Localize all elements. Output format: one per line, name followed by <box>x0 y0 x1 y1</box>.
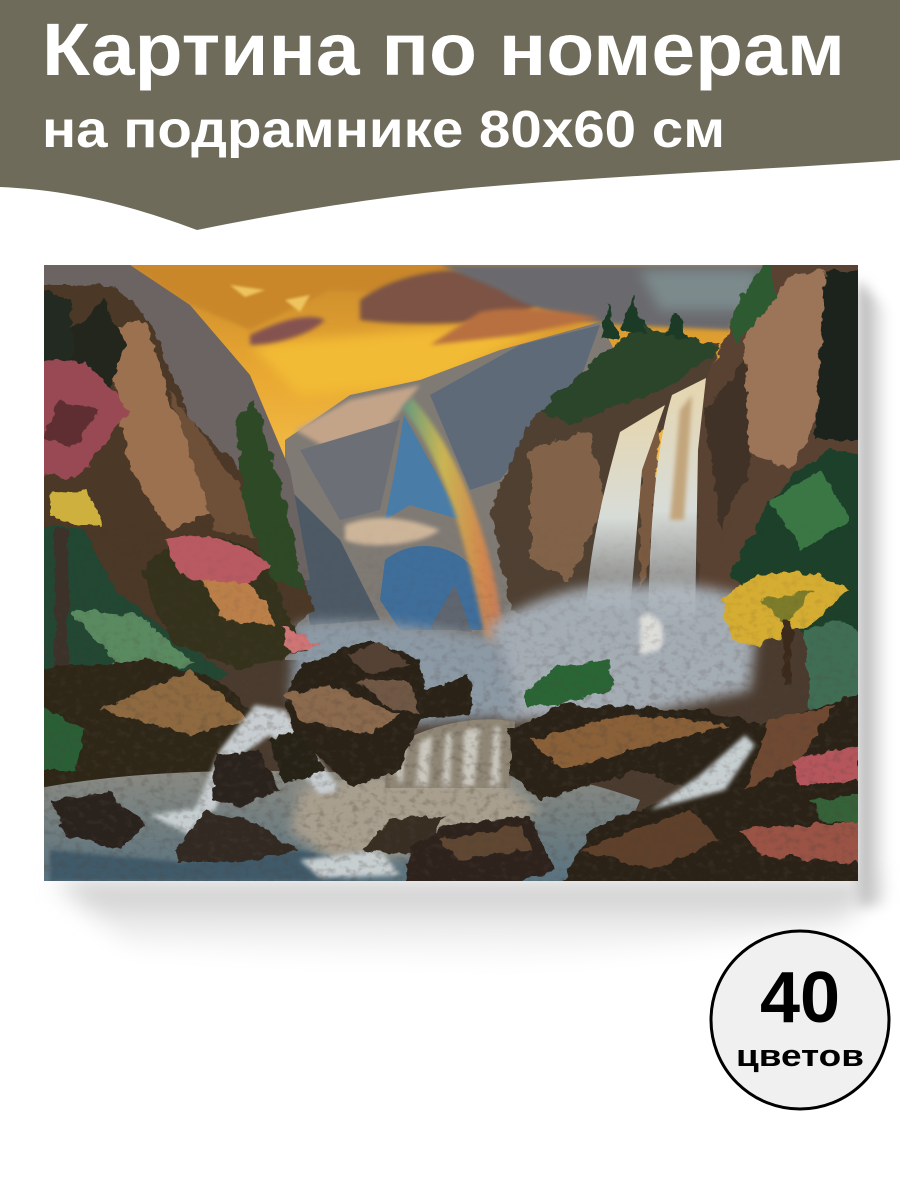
subtitle: на подрамнике 80х60 см <box>42 101 725 159</box>
valley haze <box>290 621 520 725</box>
left pink tree <box>44 358 130 480</box>
left green pines <box>44 525 229 680</box>
mist base <box>490 584 760 720</box>
badge label: цветов <box>736 1038 864 1073</box>
left cliff <box>44 283 315 628</box>
right trees <box>730 448 858 710</box>
rainbow <box>401 398 503 644</box>
left mountain <box>44 265 310 580</box>
right foreground rocks <box>510 660 875 895</box>
water highlights <box>50 773 540 881</box>
sky <box>130 265 763 480</box>
canvas drop shadow <box>55 280 888 965</box>
left cascades <box>195 705 340 810</box>
central pink tree <box>140 536 320 670</box>
brush texture: subtle dark dabs <box>44 570 858 881</box>
mist highlight <box>640 614 663 655</box>
badge number: 40 <box>760 958 840 1038</box>
header banner <box>0 0 900 230</box>
right cascade <box>650 735 755 810</box>
twin waterfalls <box>586 378 706 620</box>
central cascade <box>385 719 515 788</box>
distant mountains <box>285 322 640 660</box>
central boulders <box>212 640 472 808</box>
yellow tree <box>722 572 850 685</box>
bottom boulders <box>52 792 555 890</box>
painting: waterfall landscape <box>30 255 875 895</box>
left yellow foliage <box>50 490 105 525</box>
underpainting <box>206 490 810 812</box>
badge: 40 colours <box>711 931 889 1109</box>
title: Картина по номерам <box>42 8 845 91</box>
right cliff with rocky ledge <box>490 265 858 614</box>
river water <box>44 771 640 881</box>
left foreground rocks and grass <box>44 657 253 788</box>
